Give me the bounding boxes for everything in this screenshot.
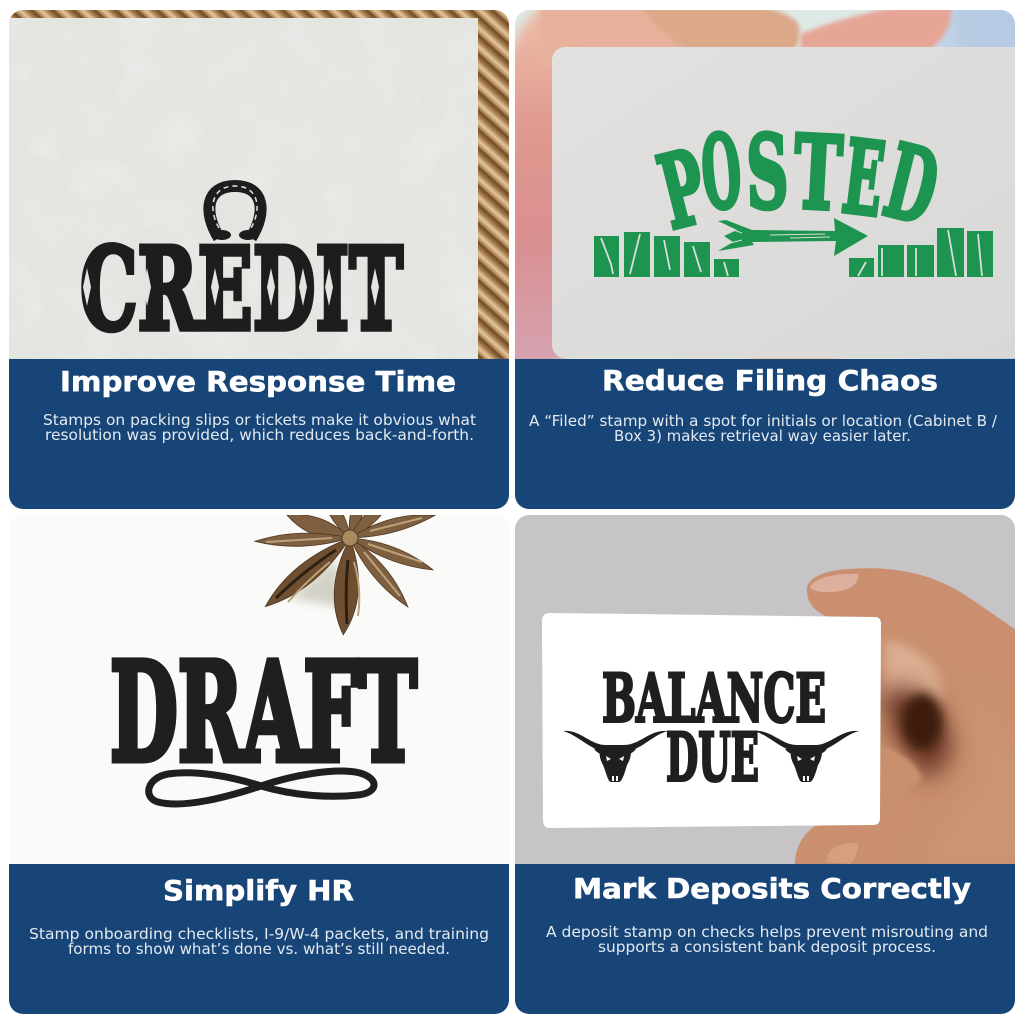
- caption panel: [515, 864, 1015, 1014]
- photo: hand holding posted card: [505, 0, 1024, 370]
- stamp text: posted: E: [837, 117, 890, 240]
- photo: draft stamp with star anise: [112, 515, 436, 808]
- stamp text: posted: D: [874, 121, 950, 248]
- body text: A deposit stamp on checks helps prevent misrouting and: [546, 923, 988, 941]
- stamp icon: left longhorn skull: [563, 731, 668, 782]
- body text: forms to show what’s done vs. what’s still needed.: [68, 940, 450, 958]
- hand skin: [795, 568, 1024, 870]
- caption panel: [9, 359, 509, 509]
- stamp text: posted: O: [697, 111, 746, 233]
- hand skin: [505, 0, 951, 370]
- panel: mark deposits correctly: [515, 515, 1024, 1014]
- body text: A “Filed” stamp with a spot for initials or location (Cabinet B /: [529, 412, 998, 430]
- heading: Mark Deposits Correctly: [573, 872, 971, 905]
- stamp text: posted: T: [791, 112, 845, 233]
- icon: star anise: [254, 515, 436, 636]
- stamp icon: horseshoe: [209, 186, 261, 240]
- stamp icon: left fence: [594, 232, 739, 277]
- stamp icon: arrow: [718, 218, 868, 256]
- panel: improve response time: [9, 10, 509, 509]
- body text: Box 3) makes retrieval way easier later.: [614, 427, 911, 445]
- heading: Reduce Filing Chaos: [602, 364, 938, 397]
- body text: [30, 928, 488, 954]
- stamp text: credit: [81, 242, 404, 334]
- body text: [44, 414, 476, 443]
- stamp text: credit: CREDIT: [80, 223, 403, 356]
- stamp text: due: DUE: [666, 718, 759, 796]
- body text: Stamps on packing slips or tickets make it obvious what: [43, 411, 476, 429]
- caption panel: [515, 359, 1015, 509]
- stamp icon: right fence: [849, 228, 993, 277]
- body text: resolution was provided, which reduces back-and-forth.: [45, 426, 474, 444]
- body text: [529, 414, 997, 444]
- body text: [546, 926, 987, 955]
- photo: credit stamp on paper: [9, 10, 509, 359]
- card: [542, 613, 881, 828]
- stamp text: balance: BALANCE: [602, 660, 826, 738]
- body text: supports a consistent bank deposit process.: [598, 938, 936, 956]
- stamp text: posted: [654, 130, 937, 231]
- body text: Stamp onboarding checklists, I-9/W-4 packets, and training: [29, 925, 489, 943]
- card: [552, 47, 1024, 358]
- heading: Improve Response Time: [60, 365, 456, 398]
- photo: hand holding balance due card: [515, 515, 1024, 870]
- stamp text: draft: DRAFT: [110, 633, 417, 793]
- panel: simplify hr: [9, 478, 509, 1014]
- stamp text: posted: P: [648, 127, 718, 252]
- stamp icon: infinity lasso: [149, 771, 374, 804]
- heading: Simplify HR: [163, 874, 354, 907]
- stamp icon: right longhorn skull: [754, 731, 859, 782]
- caption panel: [9, 864, 509, 1014]
- stamp text: posted: S: [745, 112, 789, 232]
- panel: reduce filing chaos: [505, 0, 1024, 509]
